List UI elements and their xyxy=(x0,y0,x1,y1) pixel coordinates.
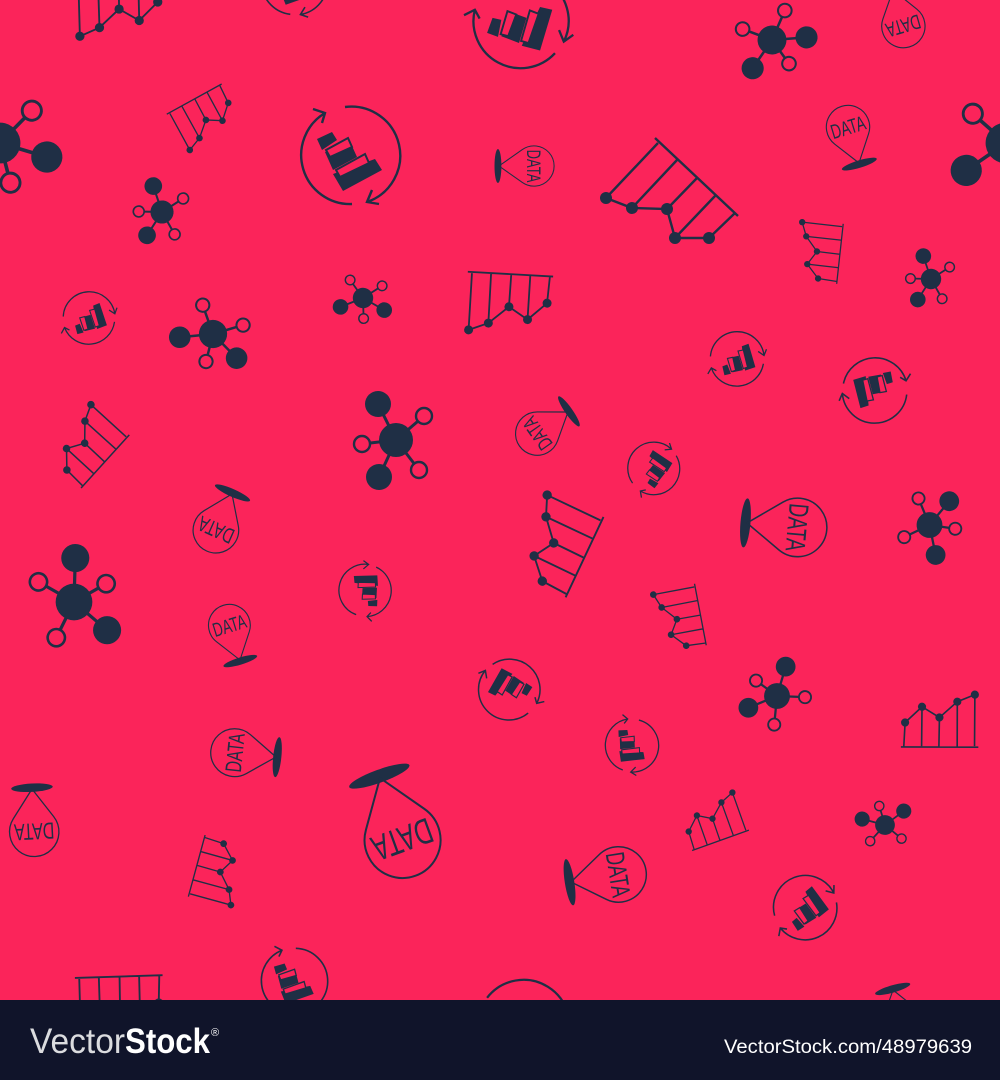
icon: line chart left xyxy=(62,400,130,488)
icon: data pin right: DATA xyxy=(780,502,815,553)
footer bar xyxy=(0,1000,1000,1080)
icon: molecule lower xyxy=(728,647,822,742)
icon: data pin large xyxy=(341,757,451,889)
footer logo: Vector xyxy=(30,1022,125,1061)
icon: refresh chart bottom xyxy=(257,944,332,1018)
icon: molecule right edge xyxy=(942,92,1000,201)
icon: refresh chart top edge xyxy=(257,0,332,19)
icon: line chart lower left xyxy=(167,828,255,924)
icon: data pin upper right: DATA xyxy=(828,112,869,144)
icon: data pin large: DATA xyxy=(366,810,439,869)
icon: line chart bottom left xyxy=(45,933,178,1066)
icon: line chart top left xyxy=(44,0,177,65)
icon: molecule small centre xyxy=(332,274,395,326)
icon: molecule large xyxy=(354,391,432,490)
icon: refresh chart lower xyxy=(597,711,667,780)
icon: refresh chart sideways xyxy=(330,556,400,625)
icon: data pin bottom centre: DATA xyxy=(600,850,637,900)
icon: refresh chart bottom arc xyxy=(458,961,588,1080)
footer logo: Stock xyxy=(125,1022,210,1061)
icon: refresh chart tilted xyxy=(467,648,551,731)
icon: refresh chart lower right xyxy=(769,871,841,944)
icon: refresh chart xyxy=(705,327,769,391)
footer logo xyxy=(30,1022,219,1061)
icon: molecule left edge xyxy=(0,92,66,201)
icon: data pin left xyxy=(186,480,255,560)
icon: refresh chart left xyxy=(59,288,119,348)
icon: data pin bottom centre xyxy=(561,843,650,910)
icon: molecule small lower right xyxy=(852,796,917,851)
icon: data pin far left xyxy=(7,782,60,858)
icon: data pin upper centre xyxy=(494,146,554,186)
icon: refresh chart top xyxy=(454,0,588,88)
icon: molecule right xyxy=(893,481,970,569)
icon: data pin centre: DATA xyxy=(518,412,557,454)
icon: data pin bottom right xyxy=(871,979,930,1053)
icon: line chart mid right xyxy=(636,566,731,658)
icon: data pin right xyxy=(738,493,829,559)
icon: line chart centre xyxy=(436,232,567,359)
icon: molecule top right xyxy=(721,0,826,91)
icon: data pin sideways xyxy=(208,726,284,781)
icon: refresh chart large xyxy=(301,107,400,204)
icon: line chart small xyxy=(157,71,236,161)
icon: data pin left: DATA xyxy=(194,511,238,549)
icon: data pin top right: DATA xyxy=(883,9,923,41)
icon: line chart right xyxy=(781,200,870,293)
icon: data pin upper centre: DATA xyxy=(522,150,543,183)
footer logo: ® xyxy=(211,1027,219,1039)
icon: line chart middle xyxy=(512,476,623,604)
icon: molecule xyxy=(163,292,262,381)
icon: data pin top right xyxy=(871,0,930,53)
icon: line chart lower xyxy=(679,779,762,869)
icon: molecule large left xyxy=(17,535,136,666)
icon: line chart large xyxy=(600,138,738,244)
icon: refresh chart middle xyxy=(619,433,689,504)
icon: data pin lower left: DATA xyxy=(210,611,250,642)
icon: line chart upright xyxy=(888,669,1000,786)
icon: data pin centre xyxy=(507,391,584,464)
icon: molecule small right xyxy=(902,246,956,312)
icon: refresh chart inverted xyxy=(836,351,914,430)
icon: data pin sideways: DATA xyxy=(220,731,250,773)
icon: data pin lower left xyxy=(203,599,261,671)
icon: molecule small xyxy=(129,175,191,249)
icon: data pin upper right xyxy=(821,100,881,174)
footer image id: VectorStock.com/48979639 xyxy=(724,1037,972,1058)
